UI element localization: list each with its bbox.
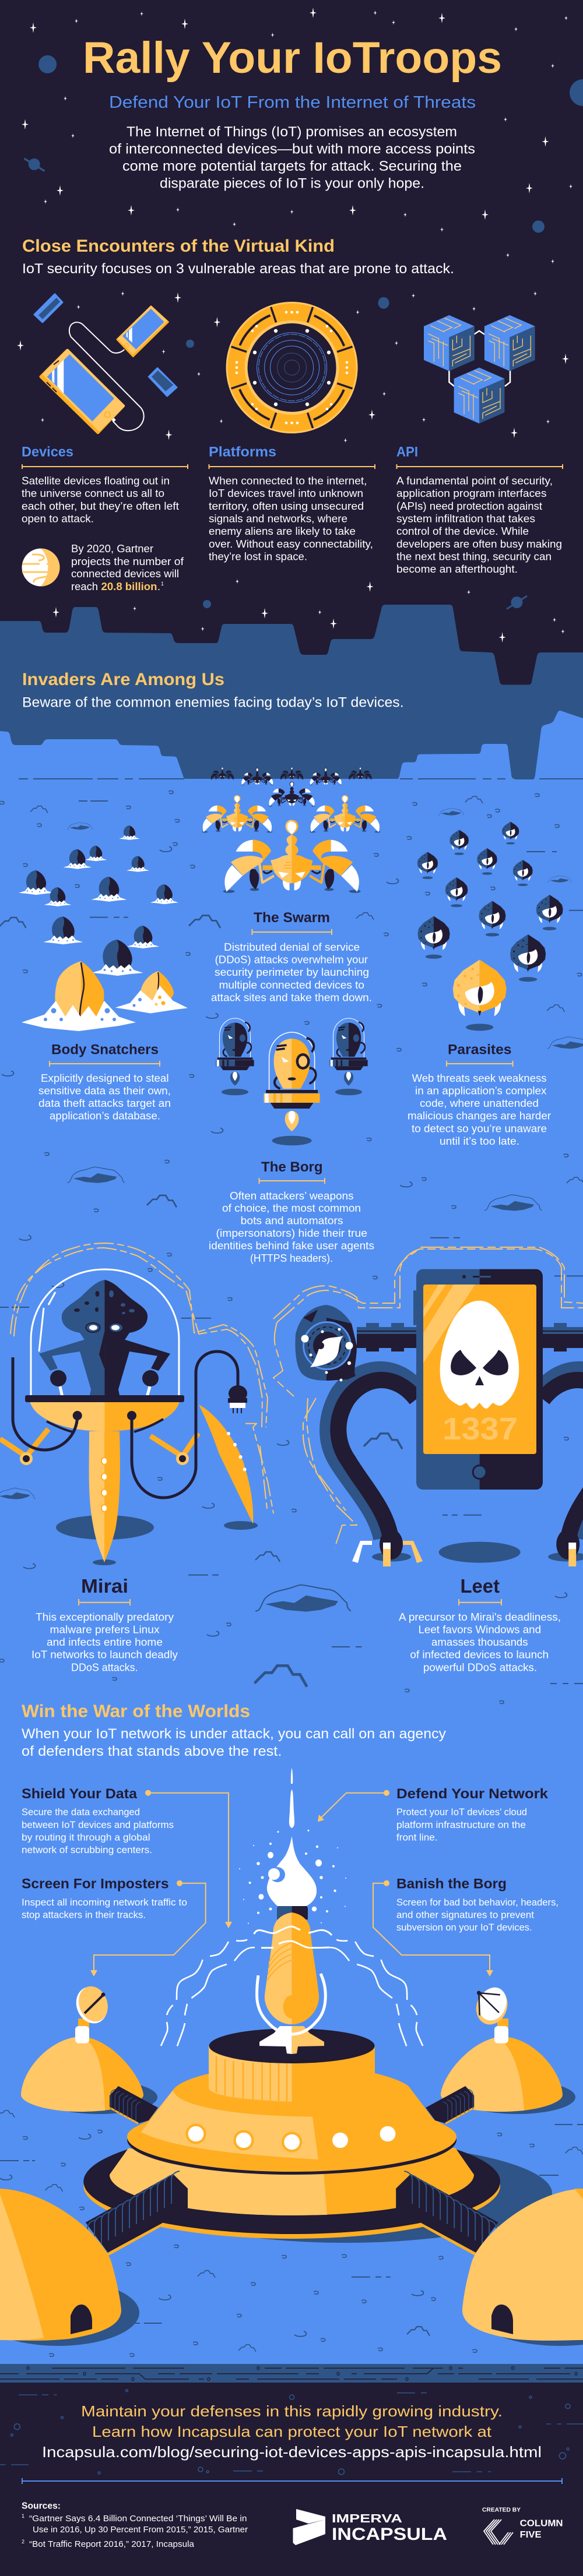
panel: API [396,444,563,575]
glass dome [31,1269,179,1398]
leg dots [227,1432,247,1472]
chains [357,1323,583,1351]
text: shield your data: network of scrubbing centers. [22,1844,152,1855]
right dome [441,2037,563,2112]
text: platforms: enemy aliens are likely to take [209,525,356,537]
panel: leet [399,1575,561,1674]
lower tier [110,2148,474,2215]
sources: 1 [22,2513,24,2519]
subtitle: Defend Your IoT From the Internet of Threats [109,93,476,112]
illustration: defense base tiers [83,2028,500,2254]
left side claw [0,1429,198,1456]
circuit strip [0,2364,583,2383]
logo: column five: COLUMN [520,2519,563,2529]
leg studs [101,1458,107,1512]
panel: the swarm [211,910,372,1004]
intro paragraph: The Internet of Things (IoT) promises an ecosystem [127,124,457,140]
text: parasites: in an application’s complex [415,1085,547,1096]
panel: mirai [31,1575,178,1674]
icon: platforms portal ring [226,302,358,433]
energy waves left [161,1940,255,2046]
barrel [265,1912,319,2024]
text: parasites: code, where unattended [420,1098,539,1109]
text: mirai [31,1611,178,1674]
left arm [331,1373,423,1566]
stat: connected devices: reach [71,581,98,592]
hemisphere base [30,1401,180,1431]
icon: charging cable [69,322,144,430]
text: banish the borg: Screen for bad bot behavior, headers, [396,1897,559,1908]
ground with near mountain range [0,711,583,2364]
stat: connected devices: By 2020, Gartner [71,543,153,555]
text: banish the borg: and other signatures to prevent [396,1909,534,1920]
text: API: control of the device. While [396,525,529,537]
heading: parasites: Parasites [448,1042,512,1058]
arrow: screen for imposters [90,1880,206,1977]
text: body snatchers: application’s database. [50,1110,160,1122]
text: API: become an afterthought. [396,563,518,575]
sources [22,2501,248,2549]
text: the swarm: security perimeter by launching [215,966,369,978]
text: body snatchers: Explicitly designed to steal [41,1072,169,1084]
panel: the borg [209,1159,374,1264]
small egg [115,971,188,1014]
right arm [543,1373,583,1566]
divider: parasites [447,1061,513,1067]
logo: column five: CREATED BY [482,2507,521,2514]
illustration: leet robot [295,1269,583,1566]
text: leet: of infected devices to launch [410,1649,549,1660]
heading: shield your data: Shield Your Data [22,1786,138,1802]
stat: connected devices: 20.8 billion [101,581,157,592]
alien body [39,1280,170,1398]
energy waves across barrel [254,1926,332,1948]
top cylinder [209,2028,375,2102]
call to action: Maintain your defenses in this rapidly growing industry. [81,2402,503,2420]
icon: small blue phone right [149,368,177,396]
text: API: developers are often busy making [396,538,562,550]
eye creature [295,1305,357,1382]
text: the borg: (HTTPS headers). [250,1252,333,1264]
heading: mirai: Mirai [81,1575,128,1597]
section intro: close encounters: IoT security focuses on 3 vulnerable areas that are prone to attack. [22,261,454,277]
text: API: system infiltration that takes [396,513,535,524]
text: the borg: bots and automators [241,1215,343,1227]
text: parasites: Web threats seek weakness [412,1072,546,1084]
cannon foot [259,2026,324,2054]
stat: connected devices [71,543,184,592]
panel: devices [22,444,188,592]
icon: striped planet [22,549,59,586]
text: the borg: (impersonators) hide their true [216,1227,367,1239]
illustration: mirai signal waves [10,1243,273,1513]
cables [13,1351,238,1498]
divider: devices [22,464,188,469]
text: API: A fundamental point of security, [396,475,553,487]
illustration: leet signal waves [273,1247,583,1548]
call to action [42,2402,542,2461]
text: leet: amasses thousands [431,1636,528,1648]
text: body snatchers: data theft attacks target an [38,1098,171,1109]
text: the swarm [211,941,372,1004]
panel: body snatchers [38,1042,171,1122]
illustration: body snatcher orange eggs [22,961,188,1031]
text: mirai: malware prefers Linux [50,1624,160,1636]
arrow: banish the borg [373,1880,493,1977]
large arms [86,2171,188,2254]
text: the borg [209,1190,374,1264]
illustration: small domes with dishes [21,1982,563,2112]
heading: platforms: Platforms [209,444,276,460]
section intro: win the war: When your IoT network is under attack, you can call on an agency [22,1726,446,1742]
shadows [56,1515,258,1565]
heading: screen for imposters: Screen For Imposters [22,1876,169,1892]
ground craters [0,808,583,1612]
text: leet: powerful DDoS attacks. [423,1662,537,1674]
text: parasites [408,1072,551,1147]
phone screen [423,1285,536,1454]
sources: 2 [22,2539,24,2545]
stat: connected devices: 1 [161,581,164,587]
beam drops [289,1768,294,1828]
left large dome [0,2189,121,2341]
divider: platforms [209,464,375,469]
right dish [471,1984,512,2044]
call to action: Learn how Incapsula can protect your IoT network at [92,2423,492,2440]
phone code 1337: 1337 [442,1411,518,1446]
sources: “Gartner Says 6.4 Billion Connected ‘Things’ Will Be in [29,2514,247,2524]
left dish [71,1982,113,2044]
text: devices: the universe connect us all to [22,488,164,499]
text: defend your network: Protect your IoT devices’ cloud [396,1806,527,1818]
text: the borg: Often attackers’ weapons [230,1190,353,1202]
text: body snatchers: sensitive data as their own, [38,1085,171,1096]
ground dashes [0,779,583,2323]
skull [440,1301,519,1409]
text: platforms: IoT devices travel into unknown [209,488,363,499]
text: leet: Leet favors Windows and [419,1624,541,1636]
text: leet: A precursor to Mirai's deadliness, [399,1611,561,1623]
text: API: (APIs) need protection against [396,500,542,512]
divider: the borg [259,1178,325,1184]
flame [267,1836,317,1906]
text: platforms: they’re lost in space. [209,551,307,563]
small arms [110,2086,158,2123]
illustration: body snatcher rocks [19,825,178,976]
logo: imperva incapsula: IMPERVA [332,2513,402,2525]
text: shield your data: by routing it through a global [22,1832,150,1843]
divider: body snatchers [50,1061,160,1067]
footer divider [22,2478,562,2484]
text: shield your data [22,1806,174,1855]
text: parasites: to detect so you’re unaware [412,1123,547,1135]
planets [24,55,583,609]
illustration: cannon [161,1768,423,2054]
intro paragraph: disparate pieces of IoT is your only hope. [160,176,424,191]
text: defend your network [396,1806,527,1843]
control bar [25,1395,184,1402]
logo: column five: FIVE [520,2530,542,2540]
text: the borg: of choice, the most common [222,1202,361,1214]
call to action: Incapsula.com/blog/securing-iot-devices-apps-apis-incapsula.html [42,2443,542,2461]
illustration: mirai walker [0,1269,258,1565]
stars [17,8,573,643]
icon: API cubes [424,315,535,424]
plug [228,1385,247,1413]
icon: devices phones and cable [34,294,177,433]
text: mirai: This exceptionally predatory [36,1611,174,1623]
text: screen for imposters: stop attackers in their tracks. [22,1909,146,1920]
divider: the swarm [252,929,332,935]
text: shield your data: Secure the data exchanged [22,1806,140,1818]
phone [413,1269,543,1490]
joints [20,1452,189,1465]
icon: small blue phone top [34,294,62,322]
text: platforms: When connected to the internet, [209,475,367,487]
illustration: defense base shadows [0,2080,583,2346]
text: screen for imposters: Inspect all incoming network traffic to [22,1897,187,1908]
heading: win the war: Win the War of the Worlds [22,1701,250,1721]
footer decoration [0,2390,583,2475]
heading: invaders: Invaders Are Among Us [22,670,224,689]
text: platforms: over. Without easy connectability, [209,538,373,550]
heading: banish the borg: Banish the Borg [396,1876,507,1892]
text: API: the next best thing, security can [396,551,552,563]
illustration: large domes [0,2189,583,2341]
panel: parasites [408,1042,551,1147]
text: API: application program interfaces [396,488,547,499]
illustration: the borg robots [216,1018,368,1145]
neck [277,1899,308,1919]
logo: imperva incapsula: INCAPSULA [332,2525,447,2544]
divider: leet [459,1599,501,1605]
text: the swarm: multiple connected devices to [219,979,364,991]
text: leet [399,1611,561,1674]
left dome [21,2037,143,2112]
text: the swarm: (DDoS) attacks overwhelm your [215,954,368,966]
upper tier [127,2073,456,2172]
text: mirai: and infects entire home [47,1636,163,1648]
heading: the borg: The Borg [261,1159,323,1175]
text: the borg: identities behind fake user agents [209,1240,374,1252]
heading: the swarm: The Swarm [254,910,330,926]
white ring [257,1974,325,2034]
text: mirai: IoT networks to launch deadly [31,1649,178,1660]
portholes [185,2124,395,2152]
text: platforms: territory, often using unsecured [209,500,364,512]
logo: column five [482,2507,563,2545]
heading: API: API [396,444,418,460]
text: shield your data: between IoT devices and platforms [22,1819,174,1830]
panel: platforms [209,444,375,563]
logo: imperva incapsula [293,2509,447,2545]
text: body snatchers [38,1072,171,1122]
text: API [396,475,562,575]
heading: devices: Devices [22,444,73,460]
ground mountain outlines [0,796,583,2352]
divider: API [396,464,563,469]
heading: close encounters: Close Encounters of the Virtual Kind [22,237,335,256]
text: devices [22,475,179,524]
text: banish the borg: subversion on your IoT devices. [396,1922,532,1933]
ground swirl marks [0,791,582,2356]
text: defend your network: front line. [396,1832,438,1843]
energy waves right [329,1940,423,2046]
intro paragraph: of interconnected devices—but with more access points [109,142,475,157]
text: devices: open to attack. [22,513,94,524]
shadow [439,1542,521,1563]
panel: banish the borg [396,1876,559,1933]
spark dots [239,1830,346,1924]
text: platforms [209,475,373,563]
section intro: invaders: Beware of the common enemies facing today’s IoT devices. [22,695,404,711]
arrow: shield your data [145,1790,232,1928]
section intro: win the war: of defenders that stands above the rest. [22,1744,282,1759]
illustration: the swarm scorpions [202,767,380,893]
heading: defend your network: Defend Your Network [396,1786,549,1802]
text: mirai: DDoS attacks. [71,1662,138,1674]
intro paragraph [109,124,475,191]
sources: Sources: [22,2501,61,2511]
illustration: parasites [417,821,563,1031]
right leg [199,1405,253,1524]
divider: mirai [79,1599,130,1605]
stat: connected devices: . [157,581,160,592]
text: platforms: signals and networks, where [209,513,347,524]
panel: screen for imposters [22,1876,187,1920]
text: screen for imposters [22,1897,187,1920]
arrow: defend your network [318,1790,389,1822]
heading: body snatchers: Body Snatchers [51,1042,159,1058]
speaker [462,1275,491,1279]
heading: leet: Leet [461,1575,500,1597]
text: the swarm: Distributed denial of service [224,941,360,953]
sources: “Bot Traffic Report 2016,” 2017, Incapsula [29,2540,195,2549]
intro paragraph: come more potential targets for attack. Securing the [122,158,462,174]
text: defend your network: platform infrastructure on the [396,1819,526,1830]
text: parasites: malicious changes are harder [408,1110,551,1122]
right large dome [462,2189,583,2341]
section intro: win the war [22,1726,446,1759]
home button [472,1465,487,1480]
text: banish the borg [396,1897,559,1933]
panel: defend your network [396,1786,549,1843]
large egg [22,961,136,1031]
title: Rally Your IoTroops [83,33,502,83]
panel: shield your data [22,1786,174,1855]
icon: medium phone [117,306,168,357]
central leg [89,1431,120,1562]
icon: large phone [41,350,124,433]
stat: connected devices: projects the number of [71,556,184,567]
text: devices: each other, but they’re often left [22,500,179,512]
text: the swarm: attack sites and take them down. [211,992,372,1004]
sources: Use in 2016, Up 30 Percent From 2015,” 2015, Gartner [33,2525,248,2535]
far mountain range [0,605,583,2383]
text: devices: Satellite devices floating out in [22,475,170,487]
text: parasites: until it’s too late. [440,1135,519,1147]
stat: connected devices: connected devices will [71,568,179,580]
